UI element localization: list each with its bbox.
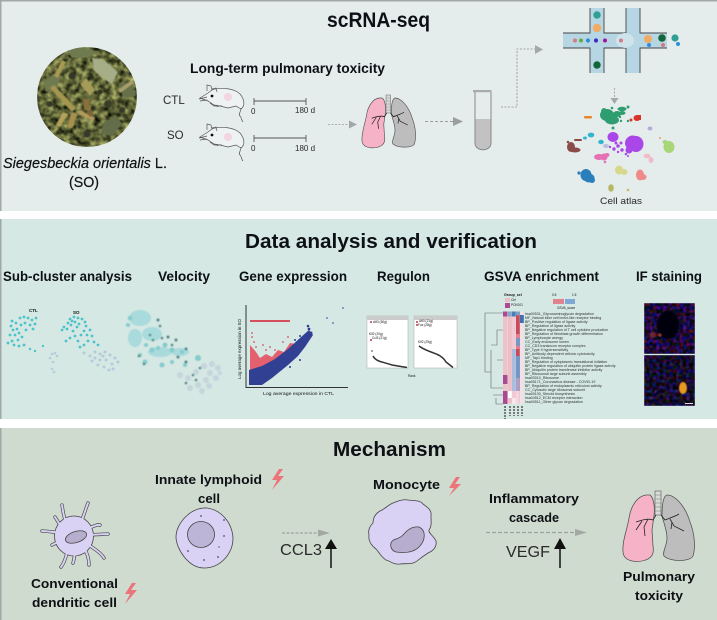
chart: regulon rank plots: Atf3 (21g) bbox=[419, 319, 433, 323]
chart: gene expression scatter: Log average expression in SO bbox=[237, 318, 242, 379]
chart: GSVA heatmap: BP_Negative regulation of T cell cytokine production bbox=[525, 328, 608, 332]
timeline: CTL 0 to 180 d: 180 d bbox=[295, 106, 315, 115]
chart: sub-cluster scatter: SO bbox=[73, 310, 80, 315]
chart: GSVA heatmap: hsa05171_Coronavirus disease - COVID-19 bbox=[525, 380, 595, 384]
chart: GSVA heatmap: hsa00531_Glycosaminoglycan degradation bbox=[525, 312, 594, 316]
arrow: tube to microfluidic chip bbox=[501, 45, 543, 107]
arrow: CCL3 signal bbox=[282, 530, 330, 536]
heading: Gene expression: Gene expression bbox=[239, 268, 347, 284]
chart: regulon rank plots: Rank bbox=[408, 374, 416, 378]
heading: scRNA-seq: scRNA-seq bbox=[327, 9, 430, 32]
chart: GSVA heatmap: CC_Early endosome lumen bbox=[525, 340, 569, 344]
chart: GSVA heatmap: 0.5 bbox=[552, 293, 557, 297]
label: Conventional dendritic cell bbox=[31, 577, 118, 610]
diagram: microfluidic chip bbox=[563, 8, 680, 73]
chart: GSVA heatmap: BP_Lymphocyte anergy bbox=[525, 336, 563, 340]
label: CCL3 up bbox=[280, 539, 337, 568]
label: SO: SO bbox=[167, 130, 184, 142]
label: Innate lymphoid cell bbox=[155, 473, 262, 506]
label: Inflammatory cascade: Inflammatory bbox=[489, 492, 579, 506]
icon: lung, pulmonary toxicity bbox=[623, 491, 694, 561]
chart: GSVA heatmap: BP_Regulation of fibroblast growth differentiation bbox=[525, 332, 603, 336]
label: CTL: CTL bbox=[163, 95, 185, 107]
label: Monocyte: Monocyte bbox=[373, 478, 440, 492]
chart: regulon rank plots: Atf3 (50g) bbox=[373, 320, 387, 324]
chart: sub-cluster scatter bbox=[7, 308, 120, 373]
chart: GSVA heatmap: BP_Type II hypersensitivity bbox=[525, 348, 568, 352]
chart: GSVA heatmap: CC_Cytosolic large ribosomal subunit bbox=[525, 388, 585, 392]
chart: GSVA heatmap: BP_Ribosomal large subunit assembly bbox=[525, 372, 587, 376]
label: Inflammatory cascade: cascade bbox=[509, 511, 559, 525]
chart: GSVA heatmap: BP_Regulation of ligase activity bbox=[525, 324, 576, 328]
chart: GSVA heatmap: hsa04512_ECM receptor interaction bbox=[525, 396, 583, 400]
icon: lightning, innate lymphoid cell bbox=[272, 469, 284, 490]
label: Siegesbeckia orientalis L.: Siegesbeckia orientalis L. bbox=[3, 156, 167, 172]
heading: Mechanism: Mechanism bbox=[333, 439, 446, 461]
timeline: SO 0 to 180 d: 180 d bbox=[295, 144, 315, 153]
label: Pulmonary toxicity: toxicity bbox=[635, 589, 683, 603]
chart: GSVA heatmap: Ctrl bbox=[511, 298, 516, 302]
chart: GSVA heatmap: BP_Positive regulation of ligase activity bbox=[525, 320, 588, 324]
icon: CTL mouse bbox=[199, 85, 244, 122]
chart: GSVA heatmap: BP_Negative regulation of ubiquitin protein ligase activity bbox=[525, 364, 616, 368]
label: Conventional dendritic cell: Conventional bbox=[31, 577, 118, 591]
timeline: CTL 0 to 180 d: 0 bbox=[251, 107, 256, 116]
heading: Sub-cluster analysis: Sub-cluster analysis bbox=[3, 268, 132, 284]
label: VEGF up bbox=[506, 538, 566, 568]
photo: Siegesbeckia orientalis herb bbox=[37, 47, 137, 147]
image: IF staining control bbox=[644, 303, 695, 354]
label: Innate lymphoid cell: cell bbox=[198, 492, 220, 506]
chart: GSVA heatmap: hsa03010_Ribosome bbox=[525, 376, 559, 380]
icon: test tube bbox=[473, 90, 492, 150]
label: Inflammatory cascade bbox=[489, 492, 579, 525]
arrow: inflammatory cascade to lung bbox=[486, 529, 587, 536]
icon: SO mouse bbox=[199, 124, 244, 161]
icon: lightning, monocyte bbox=[449, 477, 461, 496]
arrow: mice to lung bbox=[328, 120, 357, 128]
chart: GSVA heatmap: hsa00511_Other glycan degradation bbox=[525, 400, 583, 404]
chart: GSVA heatmap: 1.5 bbox=[572, 293, 577, 297]
image: IF staining SO bbox=[644, 355, 695, 406]
chart: GSVA heatmap: hsa00100_Steroid biosynthesis bbox=[525, 392, 575, 396]
chart: sub-cluster scatter: CTL bbox=[29, 308, 38, 313]
chart: GSVA heatmap: Group_sel bbox=[504, 293, 522, 297]
chart: GSVA heatmap: GSVA_score bbox=[557, 306, 575, 310]
heading: Data analysis and verification: Data analysis and verification bbox=[245, 231, 537, 253]
timeline: CTL 0 to 180 d bbox=[251, 98, 315, 116]
icon: innate lymphoid cell bbox=[176, 508, 233, 568]
arrow: chip to cell atlas bbox=[610, 88, 618, 104]
chart: GSVA heatmap: BP_Ubiquitin protein transferase inhibitor activity bbox=[525, 368, 603, 372]
panel: Data analysis and verification bbox=[0, 219, 717, 419]
icon: lightning, dendritic cell bbox=[125, 583, 137, 604]
heading: Long-term pulmonary toxicity: Long-term pulmonary toxicity bbox=[190, 60, 385, 76]
label: Pulmonary toxicity bbox=[623, 570, 695, 603]
icon: lung bbox=[362, 95, 416, 148]
chart: GSVA heatmap: BP_Regulation of cytoplasmic translational initiation bbox=[525, 360, 607, 364]
label: Pulmonary toxicity: Pulmonary bbox=[623, 570, 695, 584]
heading: GSVA enrichment: GSVA enrichment bbox=[484, 268, 599, 284]
chart: regulon rank plots: Ccl3 (21g) bbox=[372, 336, 387, 340]
icon: monocyte bbox=[369, 500, 436, 564]
label: Innate lymphoid cell: Innate lymphoid bbox=[155, 473, 262, 487]
chart: GSVA heatmap: CC_CD3 translocon receptor complex bbox=[525, 344, 586, 348]
heading: Regulon: Regulon bbox=[377, 268, 430, 284]
chart: GSVA heatmap: MF_Natural killer cell lectin-like receptor binding bbox=[525, 316, 601, 320]
chart: GSVA heatmap: BP_Regulation of endoplasmic reticulum activity bbox=[525, 384, 602, 388]
chart: regulon rank plots bbox=[367, 316, 457, 378]
chart: regulon rank plots: Fos (28g) bbox=[418, 323, 432, 327]
chart: GSVA heatmap: BP_Antibody dependent cellular cytotoxicity bbox=[525, 352, 595, 356]
chart: regulon rank plots: Klf2 (25g) bbox=[418, 340, 432, 344]
chart: GSVA heatmap bbox=[485, 293, 616, 419]
label: (SO): (SO) bbox=[69, 175, 99, 191]
label: CCL3 up: CCL3 bbox=[280, 542, 322, 559]
arrow: lung to tube bbox=[425, 117, 463, 126]
chart: gene expression scatter bbox=[237, 305, 348, 396]
label: Conventional dendritic cell: dendritic cell bbox=[32, 596, 117, 610]
chart: GSVA heatmap: MF_Tap1 binding bbox=[525, 356, 553, 360]
chart: regulon rank plots: Klf2 (20g) bbox=[369, 332, 383, 336]
heading: IF staining: IF staining bbox=[636, 268, 702, 284]
panel: Mechanism bbox=[0, 428, 717, 620]
chart: RNA velocity bbox=[126, 310, 222, 394]
timeline: SO 0 to 180 d: 0 bbox=[251, 144, 256, 153]
panel: scRNA-seq bbox=[0, 0, 717, 211]
label: Cell atlas: Cell atlas bbox=[600, 196, 642, 206]
chart: gene expression scatter: Log average expression in CTL bbox=[263, 391, 335, 396]
chart: GSVA heatmap: PCK001 bbox=[511, 303, 523, 307]
icon: conventional dendritic cell bbox=[42, 503, 108, 567]
timeline: SO 0 to 180 d bbox=[251, 135, 315, 153]
heading: Velocity: Velocity bbox=[158, 268, 210, 284]
chart: cell atlas tSNE bbox=[567, 106, 674, 192]
label: VEGF up: VEGF bbox=[506, 544, 550, 561]
